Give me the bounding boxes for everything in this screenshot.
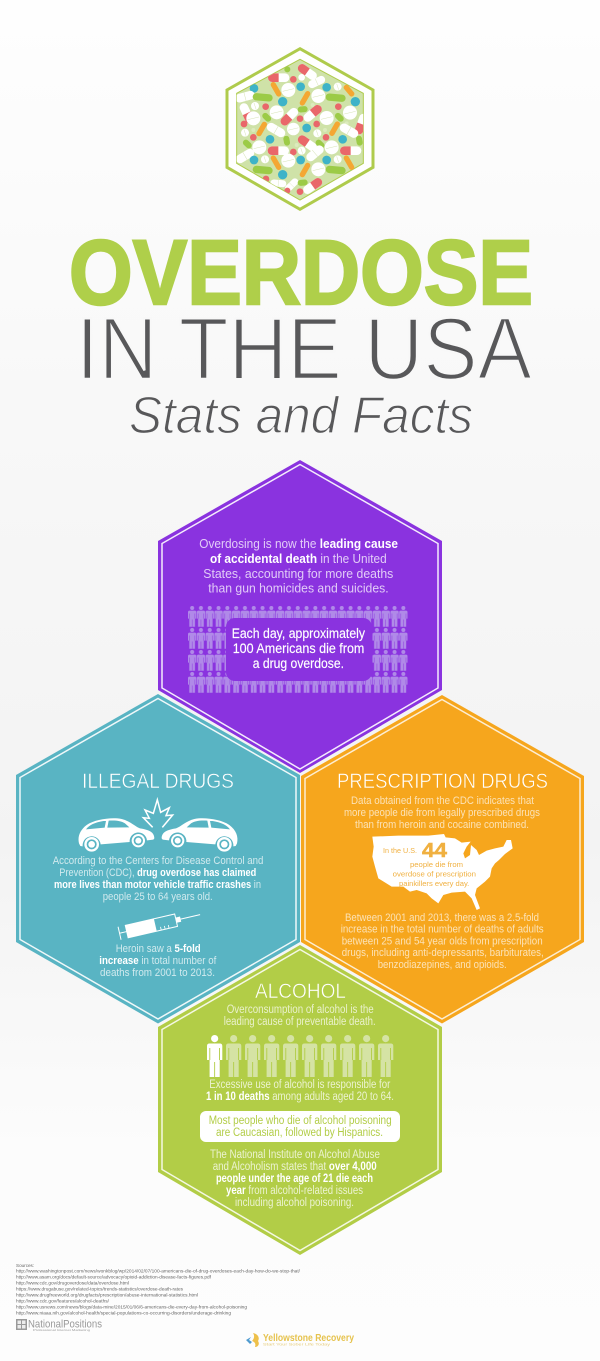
- text: overconsumption: [224, 1004, 376, 1028]
- callout: 100 americans: [226, 618, 372, 681]
- text: 44 people die: [383, 840, 476, 888]
- text: leading cause: States, accounting for more deaths: [203, 567, 393, 581]
- subtitle: stats and facts: Stats and Facts: [129, 387, 473, 445]
- text: leading cause: Overdosing is now the leading cause: [199, 537, 398, 551]
- heading: prescription drugs: PRESCRIPTION DRUGS: [337, 770, 548, 793]
- callout: alcohol poisoning: Most people who die of alcohol poisoning: [209, 1115, 392, 1127]
- text: under 21: people under the age of 21 die each: [216, 1173, 373, 1185]
- callout: 100 americans: a drug overdose.: [253, 656, 344, 671]
- text: 44 people die: In the U.S.: [383, 846, 417, 855]
- text: overconsumption: Overconsumption of alcohol is the: [227, 1004, 374, 1016]
- text: under 21: and Alcoholism states that over 4,000: [213, 1161, 377, 1173]
- text: 2.5-fold increase: increase in the total number of deaths of adults: [341, 924, 544, 936]
- text: one in ten deaths: Excessive use of alcohol is responsible for: [209, 1079, 390, 1091]
- text: heroin: [99, 943, 217, 979]
- text: 2.5-fold increase: between 25 and 54 year olds from prescription: [342, 936, 543, 948]
- text: 2.5-fold increase: benzodiazepines, and opioids.: [378, 959, 507, 971]
- heading: alcohol: ALCOHOL: [255, 980, 346, 1003]
- logo: yellowstone recovery: [246, 1332, 354, 1347]
- text: heroin: increase in total number of: [99, 955, 217, 967]
- text: cdc data: [344, 795, 540, 831]
- text: overconsumption: leading cause of preventable death.: [224, 1016, 376, 1028]
- text: cdc data: Data obtained from the CDC indicates that: [351, 795, 534, 807]
- text: 44 people die: painkillers every day.: [399, 879, 469, 888]
- text: heroin: deaths from 2001 to 2013.: [100, 967, 215, 979]
- text: cdc crash comparison: people 25 to 64 years old.: [103, 891, 213, 903]
- text: cdc data: more people die from legally prescribed drugs: [344, 807, 540, 819]
- text: one in ten deaths: [206, 1079, 394, 1103]
- text: 2.5-fold increase: Between 2001 and 2013, there was a 2.5-fold: [345, 912, 539, 924]
- heading: illegal drugs: ILLEGAL DRUGS: [82, 770, 234, 793]
- text: cdc crash comparison: According to the Centers for Disease Control and: [53, 855, 263, 867]
- icon: car crash: [79, 800, 237, 852]
- icon: usa map: [372, 834, 513, 910]
- text: cdc data: than from heroin and cocaine combined.: [355, 819, 529, 831]
- callout: 100 americans: 100 Americans die from: [233, 641, 364, 656]
- text: leading cause: [199, 537, 398, 596]
- text: sources: https://www.drugabuse.gov/related-topics/trends-statistics/overdose-death-rates: [16, 1286, 184, 1292]
- panel: alcohol: [158, 945, 442, 1255]
- text: 2.5-fold increase: [341, 912, 544, 971]
- text: under 21: The National Institute on Alcohol Abuse: [210, 1149, 380, 1161]
- text: sources: [16, 1263, 301, 1316]
- text: cdc crash comparison: Prevention (CDC), drug overdose has claimed: [59, 867, 256, 879]
- text: sources: http://www.washingtonpost.com/news/wonkblog/wp/2014/02/07/100-americans-die-of-drug-overdoses-each-day-how-do-we-stop-that/: [16, 1268, 301, 1274]
- icon: syringe: [118, 908, 202, 940]
- logo: national positions: [16, 1318, 102, 1332]
- text: cdc crash comparison: [53, 855, 263, 903]
- text: leading cause: than gun homicides and suicides.: [208, 582, 389, 596]
- logo: yellowstone recovery: Start Your Sober Life Today: [263, 1342, 330, 1346]
- callout: alcohol poisoning: [200, 1111, 400, 1142]
- panel: prescription drugs: [301, 695, 584, 1024]
- panel: illegal drugs: [16, 694, 300, 1024]
- text: sources: http://www.niaaa.nih.gov/alcohol-health/special-populations-co-occurring-disorders/underage-drinking: [16, 1310, 231, 1316]
- text: under 21: year from alcohol-related issues: [226, 1185, 363, 1197]
- chart: people grid: [188, 606, 408, 694]
- text: sources: http://www.asam.org/docs/default-source/advocacy/opioid-addiction-disease-facts-figures.pdf: [16, 1274, 212, 1280]
- logo: yellowstone recovery: Yellowstone Recovery: [263, 1332, 354, 1344]
- text: one in ten deaths: 1 in 10 deaths among adults aged 20 to 64.: [206, 1091, 394, 1103]
- text: sources: http://www.usnews.com/news/blogs/data-mine/2015/01/06/6-americans-die-every-day-from-alcohol-poisoning: [16, 1304, 247, 1310]
- text: sources: Sources:: [16, 1263, 34, 1268]
- callout: alcohol poisoning: are Caucasian, followed by Hispanics.: [216, 1127, 383, 1139]
- text: leading cause: of accidental death in the United: [210, 552, 387, 566]
- text: 44 people die: overdose of prescription: [393, 870, 476, 878]
- text: sources: http://www.cdc.gov/features/alcohol-deaths/: [16, 1298, 110, 1304]
- text: under 21: [210, 1149, 380, 1209]
- logo: national positions: Professional Internet Marketing: [33, 1328, 91, 1332]
- chart: one in ten people: [207, 1035, 393, 1077]
- text: heroin: Heroin saw a 5-fold: [116, 943, 201, 955]
- text: 44 people die: people die from: [410, 860, 463, 869]
- icon: pills hexagon: [227, 49, 373, 209]
- callout: 100 americans: Each day, approximately: [232, 626, 365, 641]
- logo: national positions: NationalPositions: [28, 1318, 102, 1330]
- text: under 21: including alcohol poisoning.: [235, 1197, 354, 1209]
- panel: leading cause of death: [158, 460, 442, 773]
- title: in the usa: IN THE USA: [76, 299, 532, 398]
- text: 44 people die: 44: [422, 840, 448, 862]
- text: cdc crash comparison: more lives than motor vehicle traffic crashes in: [54, 879, 261, 891]
- text: sources: http://www.cdc.gov/drugoverdose/data/overdose.html: [16, 1280, 129, 1286]
- text: 2.5-fold increase: drugs, including anti-depressants, barbiturates,: [342, 947, 544, 959]
- text: sources: http://www.drugfreeworld.org/drugfacts/prescription/abuse-international-statistics.html: [16, 1292, 198, 1298]
- title: overdose: OVERDOSE: [69, 222, 533, 324]
